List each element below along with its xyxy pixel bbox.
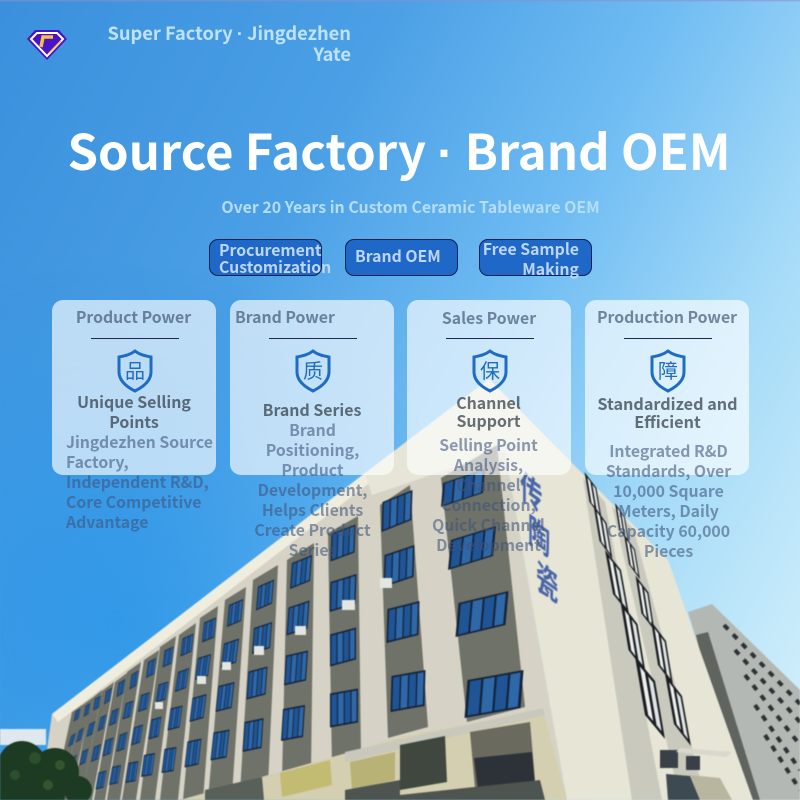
tag label: procurement customization: Customization [219, 255, 331, 278]
white distant building [0, 729, 46, 745]
tag label: procurement customization: Procurement [219, 238, 322, 261]
tag label: brand OEM: Brand OEM [355, 244, 441, 267]
body: product power [66, 430, 213, 533]
sign characters: 陶 [528, 501, 550, 568]
icon: shield 障: 障 [658, 355, 678, 384]
subheading: brand series: Brand Series [263, 398, 361, 421]
main title: Source Factory · Brand OEM [67, 114, 731, 185]
icon: shield 质: 质 [303, 355, 323, 384]
body: brand power: Product [281, 458, 344, 481]
body: product power: Jingdezhen Source [66, 430, 213, 453]
tag button: free sample making [479, 239, 592, 276]
icon: shield 障 [650, 349, 686, 393]
body: product power: Factory, [66, 450, 129, 473]
body: sales power [432, 433, 545, 556]
panel: product power [52, 300, 216, 475]
body: sales power: Connection, [441, 493, 536, 516]
tag button: procurement customization [209, 239, 322, 276]
divider: production power [624, 338, 712, 339]
logo: diamond badge [27, 30, 67, 60]
subheading: unique selling points: Points [109, 410, 159, 433]
header company name [107, 20, 351, 67]
tag button: brand OEM [345, 239, 458, 276]
divider: brand power [269, 338, 357, 339]
heading: product power: Product Power [76, 305, 191, 328]
subheading: unique selling points: Unique Selling [77, 390, 191, 413]
body: product power: Advantage [66, 510, 148, 533]
tag label: free sample making [483, 237, 579, 280]
subheading: standardized and efficient: Standardized and [597, 391, 738, 415]
body: production power: 10,000 Square [613, 479, 724, 502]
heading: brand power: Brand Power [235, 305, 335, 328]
body: production power: Meters, Daily [618, 499, 719, 522]
body: production power: Integrated R&D [609, 439, 728, 462]
header company name: Yate [314, 41, 351, 67]
divider: sales power [446, 338, 534, 339]
body: brand power: Positioning, [266, 438, 359, 461]
panel: brand power [230, 300, 394, 475]
icon: shield 品: 品 [125, 355, 145, 384]
body: brand power: Development, [258, 478, 367, 501]
heading: production power: Production Power [597, 305, 737, 328]
icon: shield 保: 保 [480, 355, 500, 384]
body: product power: Core Competitive [66, 490, 201, 513]
sign characters: 瓷 [536, 547, 558, 614]
windows [441, 469, 485, 507]
panel: sales power [407, 300, 571, 475]
subheading: channel support: Channel [456, 391, 521, 414]
body: sales power: Quick Channel [432, 513, 545, 536]
body: sales power: Analysis, [454, 453, 523, 476]
icon: shield 品 [118, 349, 152, 393]
body: production power: Standards, Over [606, 459, 731, 482]
tag label: free sample making: Free Sample [483, 237, 579, 260]
icon: shield 质 [296, 349, 330, 393]
air conditioners [155, 578, 392, 709]
subtitle: Over 20 Years in Custom Ceramic Tableware OEM [221, 195, 600, 218]
body: brand power: Series [289, 538, 336, 561]
subheading: standardized and efficient: Efficient [634, 408, 701, 432]
end wall [489, 379, 753, 800]
subheading: channel support: Support [456, 409, 521, 432]
tag label: free sample making: Making [522, 257, 579, 280]
heading: sales power: Sales Power [442, 306, 536, 329]
body: production power [606, 439, 732, 562]
body: brand power: Create Product [254, 518, 371, 541]
subheading: standardized and efficient [597, 391, 738, 432]
body: sales power: Channel [456, 473, 521, 496]
body: production power: Capacity 60,000 [607, 519, 730, 542]
body: production power: Pieces [644, 539, 693, 562]
divider: product power [91, 338, 179, 339]
sign characters [520, 457, 558, 614]
body: brand power: Brand [289, 418, 336, 441]
main facade [40, 379, 567, 800]
tag label: procurement customization [219, 238, 331, 278]
sign characters: 传 [520, 457, 542, 524]
icon: shield 保 [472, 349, 508, 393]
body: brand power [254, 418, 371, 561]
header company name: Super Factory · Jingdezhen [107, 20, 351, 46]
tree [0, 741, 92, 800]
subheading: unique selling points [77, 390, 191, 433]
panel: production power [585, 300, 749, 475]
body: product power: Independent R&D, [66, 470, 209, 493]
body: brand power: Helps Clients [262, 498, 363, 521]
body: sales power: Development [436, 533, 541, 556]
ground floor [180, 710, 567, 800]
right background building [688, 604, 800, 800]
subheading: channel support [456, 391, 521, 432]
body: sales power: Selling Point [439, 433, 538, 456]
